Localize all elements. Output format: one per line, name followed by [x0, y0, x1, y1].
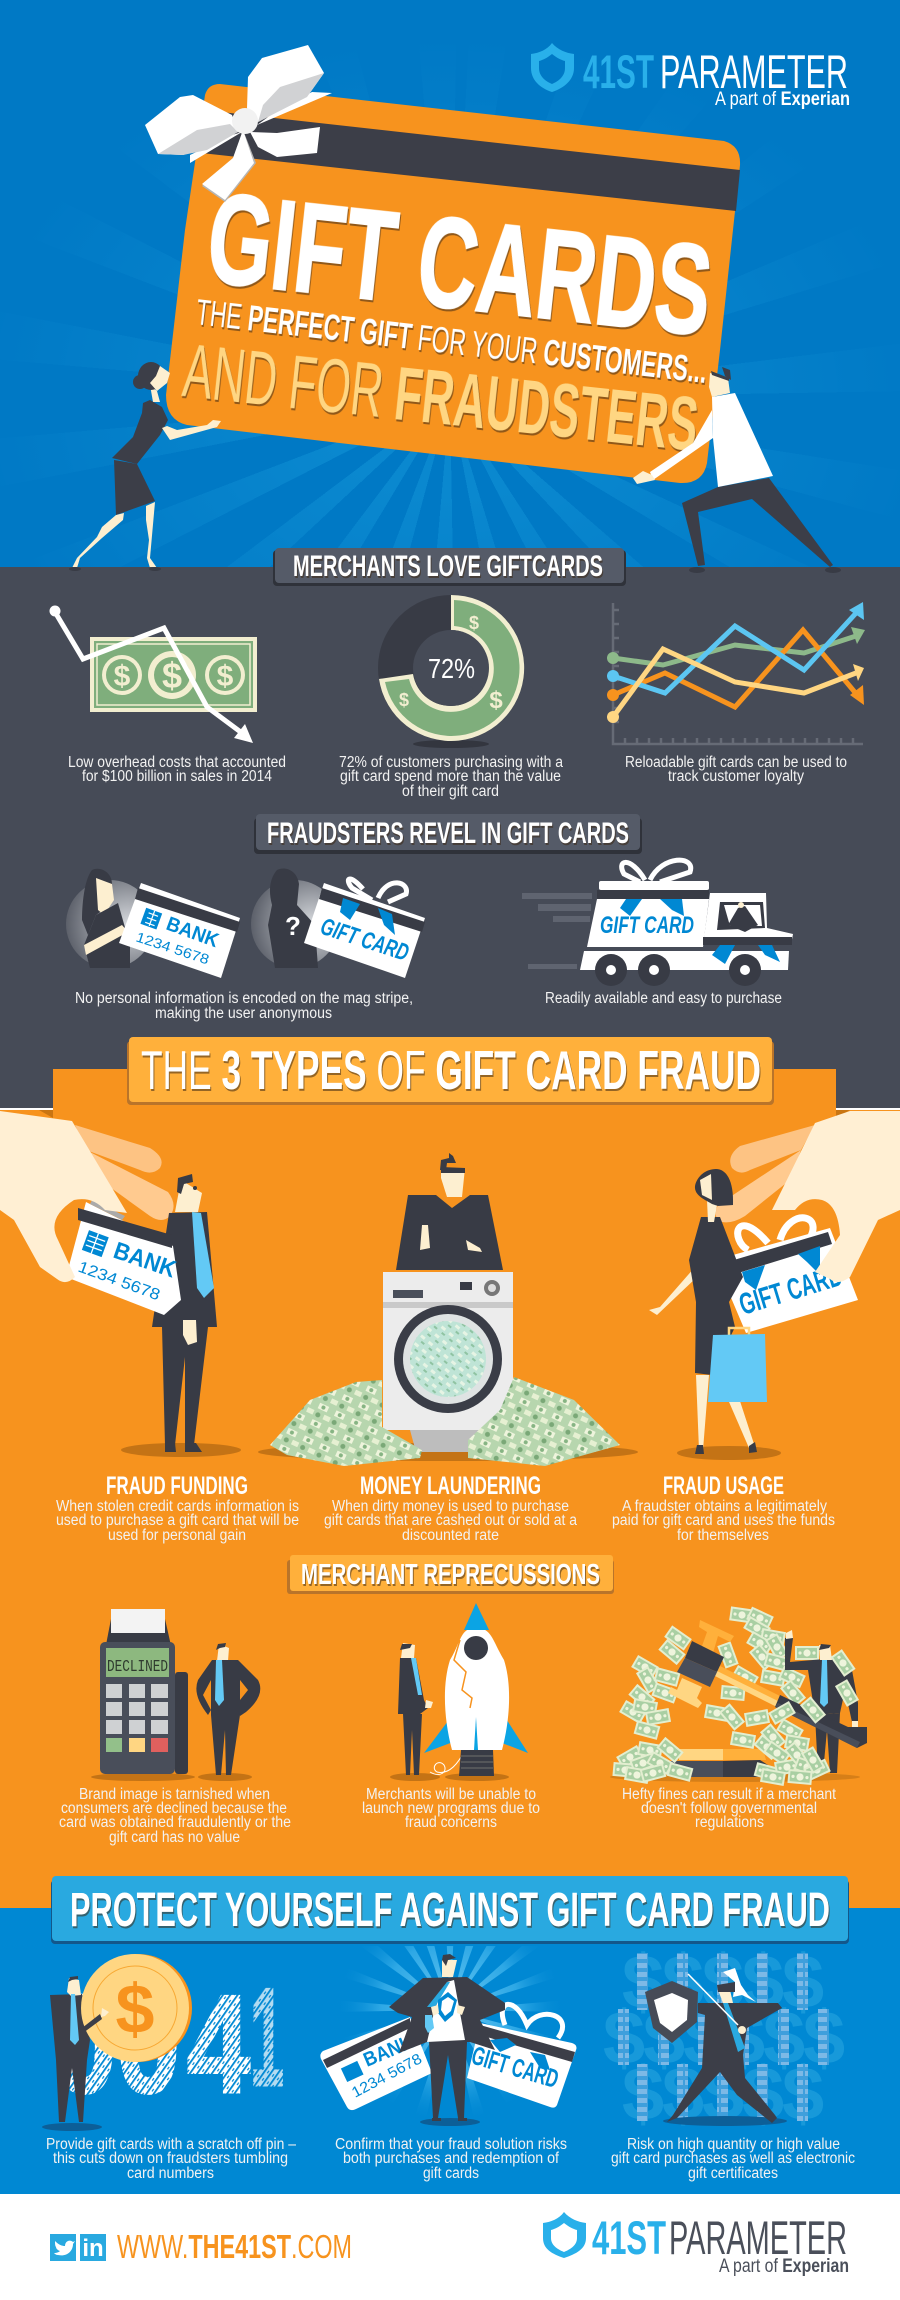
- heading: merchants love giftcards: MERCHANTS LOVE GIFTCARDS: [293, 550, 603, 583]
- text: brand image caption: [59, 1786, 291, 1846]
- bills behind the gavel: [619, 1606, 819, 1749]
- text: no personal information caption: No personal information is encoded on the mag stripe,: [75, 990, 413, 1007]
- man raising arm: [815, 1713, 840, 1773]
- text: money laundering: [324, 1472, 577, 1544]
- dollar sign pattern: $: [622, 1940, 664, 2025]
- text: 72 percent caption: [339, 754, 563, 800]
- heading: merchant reprecussions: MERCHANT REPRECUSSIONS: [301, 1559, 600, 1591]
- chart: customer loyalty line graph: [607, 602, 865, 744]
- washing machine: [383, 1272, 513, 1430]
- text: money laundering: gift cards that are cashed out or sold at a: [324, 1512, 577, 1529]
- hand: [0, 1111, 127, 1282]
- card title: [179, 167, 718, 468]
- illustration: fraud funding man, hand and bank card: [0, 1111, 241, 1457]
- text: new programs caption: fraud concerns: [405, 1814, 497, 1831]
- logo: 41st Parameter footer: A part of Experian: [719, 2256, 849, 2277]
- dollar sign pattern: [603, 1940, 845, 2137]
- text: 72 percent caption: gift card spend more than the value: [340, 768, 561, 785]
- fraudster bust: [441, 1168, 465, 1197]
- gift card: [738, 1218, 813, 1250]
- icon: linkedin: in: [82, 2235, 104, 2262]
- bills in front: [612, 1649, 859, 1786]
- illustration: superhero merchant with cards: BANK: [360, 2031, 417, 2072]
- dollar sign pattern: $: [782, 1940, 824, 2025]
- shopping bag: [729, 1328, 749, 1340]
- text: fraud usage: paid for gift card and uses the funds: [612, 1512, 835, 1529]
- text: high quantity caption: gift certificates: [688, 2165, 778, 2182]
- magnetic stripe: [192, 110, 740, 211]
- logo: 41st Parameter footer: 41ST: [592, 2211, 666, 2264]
- dollar sign pattern: $: [622, 2052, 664, 2137]
- text: readily available caption: Readily available and easy to purchase: [545, 990, 782, 1007]
- card body: [166, 84, 740, 483]
- text: brand image caption: Brand image is tarnished when: [79, 1786, 270, 1803]
- logo: 41st Parameter header: A part of Experian: [715, 89, 850, 110]
- text: hefty fines caption: regulations: [695, 1814, 764, 1831]
- chart: dollar bill with falling arrow: [50, 606, 257, 743]
- text: high quantity caption: Risk on high quantity or high value: [627, 2136, 840, 2153]
- text: fraud funding: [56, 1472, 299, 1544]
- chart: 72 percent donut: [378, 595, 524, 748]
- text: fraud solution caption: both purchases and redemption of: [343, 2150, 560, 2167]
- illustration: man, coin and scratch-off digits: 4: [187, 1967, 250, 2122]
- dollar sign pattern: $: [662, 1940, 704, 2025]
- briefcase and dark handle: [775, 1695, 867, 1748]
- illustration: fraud usage woman, hand and gift card: [649, 1111, 900, 1460]
- text: low overhead caption: Low overhead costs that accounted: [68, 754, 286, 771]
- illustration: woman pushing card: [72, 362, 221, 568]
- chart: dollar bill with falling arrow: $: [217, 660, 234, 693]
- icon: delivery truck: GIFT CARD: [600, 912, 694, 939]
- text: 1: [250, 1960, 284, 2115]
- text: scratch off caption: [46, 2136, 296, 2182]
- illustration: money laundering fraudster and washing machine: [258, 1153, 638, 1466]
- text: scratch off caption: Provide gift cards with a scratch off pin –: [46, 2136, 296, 2153]
- header sunburst background: [0, 0, 900, 570]
- illustration: fraud usage woman, hand and gift card: GIFT CARD: [735, 1259, 846, 1322]
- text: high quantity caption: [611, 2136, 855, 2182]
- gift card: [502, 2004, 563, 2038]
- text: money laundering: discounted rate: [402, 1527, 499, 1544]
- text: brand image caption: gift card has no value: [109, 1829, 240, 1846]
- illustration: man, coin and scratch-off digits: [42, 1954, 284, 2131]
- text: fraud usage: [612, 1472, 835, 1544]
- logo: 41st Parameter footer: [543, 2211, 849, 2277]
- illustration: fraudster pushing card: [633, 367, 833, 567]
- ribbon behind fraud types heading: [0, 1069, 900, 1118]
- text: 72 percent caption: of their gift card: [402, 783, 499, 800]
- logo: 41st Parameter header: 41ST: [583, 45, 654, 98]
- dollar sign pattern: $: [662, 2052, 704, 2137]
- text: money laundering: MONEY LAUNDERING: [360, 1472, 541, 1500]
- bank card: [320, 2017, 432, 2110]
- text: 72 percent caption: 72% of customers purchasing with a: [339, 754, 563, 771]
- text: fraud usage: A fraudster obtains a legitimately: [622, 1498, 827, 1515]
- hand: [772, 1111, 900, 1282]
- fraudster body: [723, 1968, 756, 2002]
- text: fraud funding: used to purchase a gift card that will be: [56, 1512, 299, 1529]
- card title: THE PERFECT GIFT FOR YOUR CUSTOMERS...: [194, 291, 709, 391]
- text: fraud funding: When stolen credit cards information is: [56, 1498, 299, 1515]
- illustration: fraud funding man, hand and bank card: BANK: [110, 1237, 180, 1284]
- chart: 72 percent donut: $: [489, 687, 503, 714]
- dollar sign pattern: $: [683, 1996, 725, 2081]
- text: fraud usage: FRAUD USAGE: [663, 1472, 784, 1500]
- dollar sign pattern: $: [723, 1996, 765, 2081]
- text: new programs caption: launch new programs due to: [362, 1800, 540, 1817]
- text: money laundering: When dirty money is used to purchase: [332, 1498, 569, 1515]
- text: scratch off caption: this cuts down on fraudsters tumbling: [53, 2150, 288, 2167]
- shield: [645, 1981, 698, 2043]
- illustration: man, coin and scratch-off digits: 00: [53, 1967, 180, 2122]
- panel: orange fraud types section: [0, 1110, 900, 1910]
- heading: merchant reprecussions: [287, 1555, 614, 1594]
- illustration: gavel fines and flying money: [610, 1606, 867, 1786]
- dollar sign pattern: $: [803, 1996, 845, 2081]
- text: fraud funding: used for personal gain: [108, 1527, 246, 1544]
- illustration: fraud funding man, hand and bank card: 1234 5678: [76, 1259, 162, 1304]
- gift card: [145, 45, 740, 483]
- superhero man: [420, 2118, 480, 2126]
- heading: merchants love giftcards: [273, 548, 626, 586]
- text: scratch off caption: card numbers: [127, 2165, 214, 2182]
- illustration: superhero merchant with cards: [320, 1946, 576, 2126]
- text: reloadable caption: track customer loyalty: [668, 768, 804, 785]
- panel: white footer: [0, 2194, 900, 2300]
- icon: woman with bank card: BANK: [163, 913, 222, 952]
- text: website url: WWW.THE41ST.COM: [117, 2228, 352, 2265]
- pale fingers: [75, 1125, 162, 1173]
- text: brand image caption: consumers are declined because the: [61, 1800, 287, 1817]
- text: fraud usage: for themselves: [677, 1527, 769, 1544]
- dollar sign pattern: $: [702, 2052, 744, 2137]
- text: fraud solution caption: [335, 2136, 567, 2182]
- icon: anonymous silhouette with gift card: [251, 869, 425, 978]
- illustration: superhero merchant with cards: GIFT CARD: [468, 2040, 562, 2094]
- text: hefty fines caption: doesn't follow governmental: [641, 1800, 817, 1817]
- text: fraud solution caption: gift cards: [423, 2165, 479, 2182]
- text: reloadable caption: Reloadable gift cards can be used to: [625, 754, 847, 771]
- icon: delivery truck: [522, 860, 793, 986]
- text: new programs caption: [362, 1786, 540, 1831]
- chart: 72 percent donut: $: [399, 690, 409, 710]
- icon: woman with bank card: 1234 5678: [134, 929, 212, 967]
- text: fraud solution caption: Confirm that your fraud solution risks: [335, 2136, 567, 2153]
- illustration: declined card terminal and merchant: [91, 1609, 260, 1781]
- icon: woman with bank card: [66, 869, 240, 978]
- chart: 72 percent donut: 72%: [428, 653, 475, 684]
- text: hefty fines caption: Hefty fines can result if a merchant: [622, 1786, 837, 1803]
- text: low overhead caption: for $100 billion in sales in 2014: [82, 768, 272, 785]
- woman: [696, 1375, 709, 1450]
- text: reloadable caption: [625, 754, 847, 785]
- money piles: [270, 1380, 422, 1466]
- dollar sign pattern: $: [763, 1996, 805, 2081]
- heading: fraudsters revel: FRAUDSTERS REVEL IN GIFT CARDS: [267, 817, 629, 850]
- text: hefty fines caption: [622, 1786, 837, 1831]
- white bow: [145, 45, 332, 202]
- icon: twitter: [50, 2234, 76, 2261]
- illustration: declined card terminal and merchant: DECLINED: [107, 1658, 168, 1677]
- card title: AND FOR FRAUDSTERS: [179, 328, 702, 468]
- text: low overhead caption: [68, 754, 286, 785]
- text: new programs caption: Merchants will be unable to: [366, 1786, 536, 1803]
- panel: dark merchants and fraudsters section: [0, 567, 900, 1108]
- text: high quantity caption: gift card purchases as well as electronic: [611, 2150, 855, 2167]
- heading: fraudsters revel: [254, 814, 642, 854]
- text: fraud funding: FRAUD FUNDING: [106, 1472, 248, 1500]
- text: no personal information caption: making the user anonymous: [155, 1005, 332, 1022]
- illustration: man and cracked rocket: [390, 1603, 528, 1781]
- dollar sign pattern: $: [742, 2052, 784, 2137]
- chart: 72 percent donut: $: [469, 613, 479, 633]
- dollar sign pattern: $: [742, 1940, 784, 2025]
- illustration: superhero merchant with cards: 1234 5678: [349, 2050, 425, 2102]
- gavel base: [679, 1749, 723, 1760]
- panel: blue protect section: [0, 1908, 900, 2194]
- text: brand image caption: card was obtained fraudulently or the: [59, 1814, 291, 1831]
- illustration: man, coin and scratch-off digits: $: [116, 1970, 154, 2048]
- icon: anonymous silhouette with gift card: GIFT CARD: [317, 913, 412, 967]
- dollar sign pattern: $: [702, 1940, 744, 2025]
- text: no personal information caption: [75, 990, 413, 1022]
- bank card: [66, 1202, 181, 1315]
- icon: anonymous silhouette with gift card: ?: [285, 911, 301, 941]
- chart: dollar bill with falling arrow: $: [162, 655, 182, 696]
- logo: 41st Parameter header: [531, 43, 850, 110]
- dollar sign pattern: $: [603, 1996, 645, 2081]
- dollar sign pattern: $: [643, 1996, 685, 2081]
- gavel head and handle: [713, 1665, 782, 1707]
- man: [121, 1443, 241, 1457]
- illustration: dollar signs and shield fraudster: [603, 1940, 845, 2137]
- chart: dollar bill with falling arrow: $: [114, 660, 131, 693]
- figure feet shadows on the band: [69, 567, 841, 573]
- dollar sign pattern: $: [782, 2052, 824, 2137]
